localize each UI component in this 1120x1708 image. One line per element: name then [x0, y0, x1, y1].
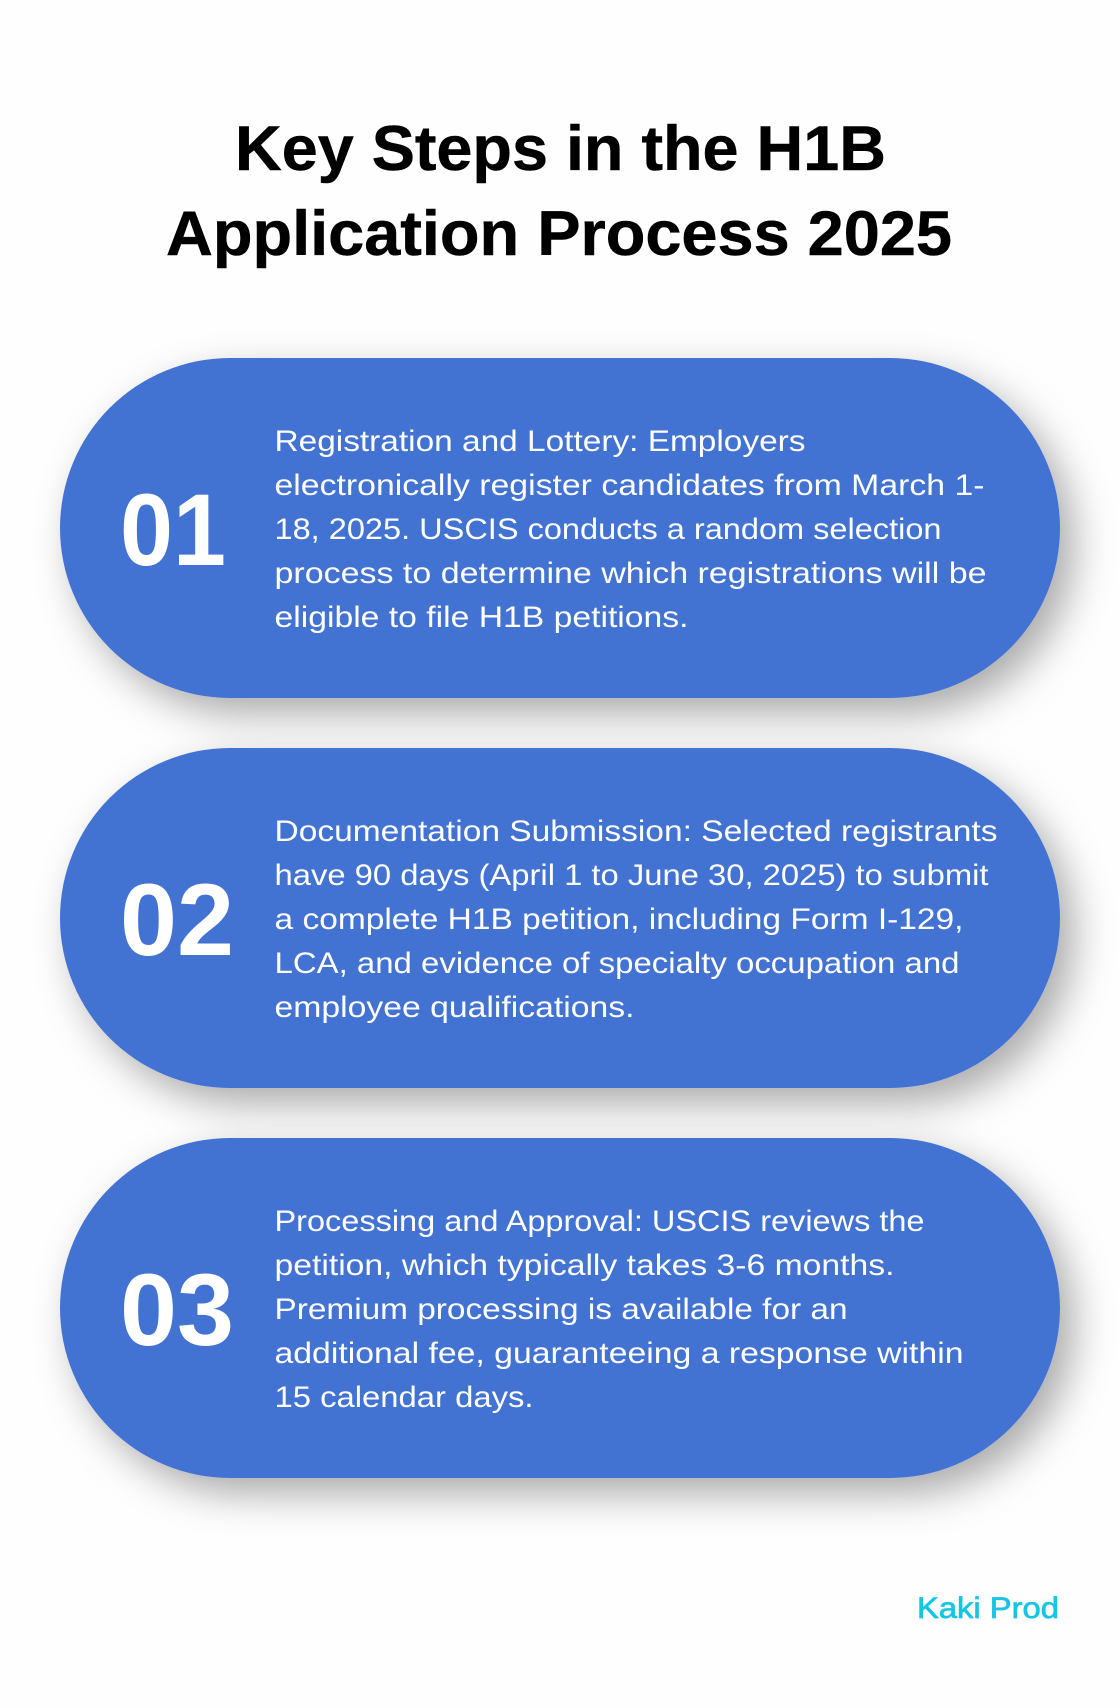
brand logo: Kaki Prod: Kaki Prod [917, 1592, 1059, 1625]
step text 03 [274, 1205, 964, 1414]
step text 03: Processing and Approval: USCIS reviews the [274, 1205, 924, 1238]
step number 02: 02 [120, 863, 234, 977]
step text 01: electronically register candidates from March 1- [274, 469, 984, 502]
step text 01 [274, 425, 986, 634]
step text 03: 15 calendar days. [274, 1381, 534, 1414]
step text 01: 18, 2025. USCIS conducts a random selection [274, 513, 941, 546]
step text 03: Premium processing is available for an [274, 1293, 848, 1326]
title [166, 114, 952, 269]
panel: step 02 documentation submission [60, 748, 1060, 1088]
step text 02: a complete H1B petition, including Form I-129, [274, 903, 964, 936]
step number 03: 03 [120, 1253, 234, 1367]
step text 01: eligible to file H1B petitions. [274, 601, 688, 634]
step number 01: 01 [120, 473, 226, 587]
step text 02 [274, 815, 998, 1024]
panel: step 01 registration and lottery [60, 358, 1060, 698]
card background 03 [60, 1138, 1060, 1478]
step text 02: Documentation Submission: Selected registrants [274, 815, 998, 848]
card background 01 [60, 358, 1060, 698]
step text 03: petition, which typically takes 3-6 months. [274, 1249, 894, 1282]
panel: step 03 processing and approval [60, 1138, 1060, 1478]
step text 02: employee qualifications. [274, 991, 634, 1024]
step text 01: Registration and Lottery: Employers [274, 425, 806, 458]
step text 03: additional fee, guaranteeing a response within [274, 1337, 964, 1370]
step text 01: process to determine which registrations will be [274, 557, 986, 590]
title: Application Process 2025 [166, 199, 952, 269]
step text 02: have 90 days (April 1 to June 30, 2025) to submit [274, 859, 989, 892]
card background 02 [60, 748, 1060, 1088]
title: Key Steps in the H1B [235, 114, 886, 184]
step text 02: LCA, and evidence of specialty occupation and [274, 947, 960, 980]
